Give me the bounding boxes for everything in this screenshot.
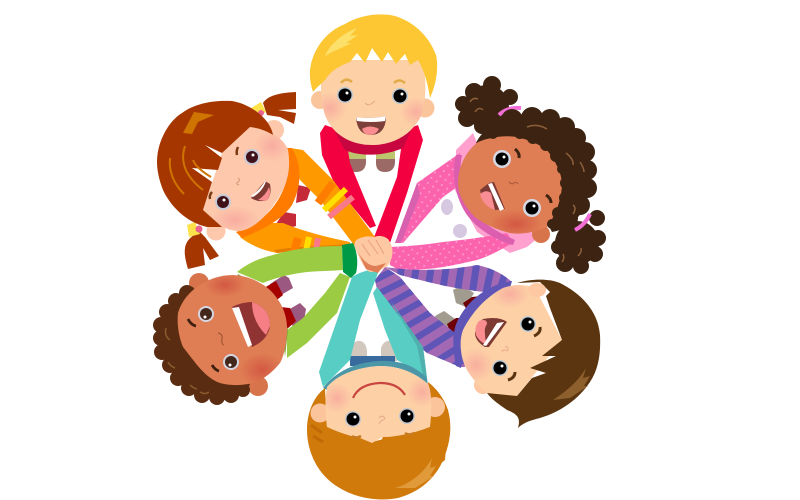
- ears: [310, 397, 445, 422]
- bun: lower: [551, 210, 606, 274]
- lower striped arm: [375, 267, 465, 367]
- shoes: [264, 275, 306, 329]
- brows: [515, 149, 551, 203]
- mouth: [251, 181, 271, 201]
- nose: [237, 178, 240, 185]
- child: boy in purple stripes (lower right): [365, 255, 600, 428]
- nose: [502, 347, 508, 352]
- cheeks: [322, 96, 424, 124]
- face: [326, 366, 431, 443]
- hair: [153, 285, 250, 405]
- shoes: [276, 185, 311, 230]
- hair shine: [166, 328, 209, 394]
- red sweater arms: [320, 125, 423, 243]
- teal arms: [319, 269, 427, 387]
- hair shine: [325, 28, 358, 56]
- child: girl in orange (upper left): [157, 92, 375, 269]
- orange arms: [240, 148, 375, 253]
- child: boy in green (lower left): [153, 243, 357, 405]
- hair fringe: [310, 420, 448, 498]
- shoes: [435, 285, 481, 336]
- hair shine: [470, 98, 584, 262]
- shirt: [455, 133, 545, 253]
- ears: [206, 120, 284, 240]
- child: blond boy (top): [310, 14, 437, 243]
- shoes and jeans: [350, 341, 397, 366]
- eyes: [198, 306, 239, 370]
- collar: [236, 148, 300, 238]
- mouth: [353, 383, 405, 398]
- lower arm: [390, 233, 513, 270]
- brows: [210, 147, 238, 199]
- hair edge scallops: [488, 125, 572, 229]
- eyes: [345, 408, 415, 427]
- upper arm: [395, 153, 460, 243]
- ears: [311, 91, 434, 118]
- child: girl in pink (upper right): [390, 76, 606, 274]
- brows: [188, 319, 219, 371]
- joined hands: [354, 236, 392, 273]
- brows: [341, 80, 405, 83]
- face: [203, 127, 289, 231]
- ears: [189, 273, 268, 396]
- nose: [379, 416, 385, 424]
- brows: [508, 327, 540, 380]
- nose: [365, 101, 375, 105]
- hair: [487, 280, 600, 428]
- ear: lower: [474, 376, 492, 394]
- brows: [352, 433, 414, 438]
- collar: [454, 155, 515, 245]
- hair shine: [395, 458, 436, 488]
- mouth: [232, 302, 270, 347]
- cheeks: [463, 285, 524, 378]
- hair: [476, 107, 597, 232]
- green arms: [237, 243, 357, 358]
- mouth: [356, 116, 386, 135]
- eyes: [492, 316, 536, 376]
- pigtail: left: [185, 222, 219, 269]
- hair: [157, 101, 273, 227]
- nose: [509, 182, 518, 184]
- hair shine: [553, 368, 590, 400]
- eyes: [337, 87, 408, 104]
- shoes: [441, 199, 467, 238]
- cheek: [496, 213, 536, 234]
- face: [178, 275, 287, 385]
- hair streaks: [311, 425, 323, 442]
- hair: [310, 14, 437, 98]
- child: child in teal (bottom): [307, 269, 450, 500]
- eyes: [215, 149, 260, 210]
- cheeks: [326, 380, 431, 410]
- collar: [453, 281, 512, 368]
- cheeks: [218, 135, 284, 230]
- bun: upper: [455, 76, 518, 134]
- cheeks: [210, 276, 278, 382]
- mouth: [480, 182, 505, 211]
- face: [458, 136, 562, 234]
- hair back: [307, 382, 450, 500]
- ear: [532, 225, 550, 243]
- hair shine: [170, 112, 214, 194]
- ear: upper: [528, 283, 546, 297]
- nose: [218, 333, 224, 345]
- eyes: [493, 150, 541, 217]
- shoes: [347, 150, 395, 172]
- collar: [323, 361, 428, 390]
- face: [321, 60, 425, 145]
- mouth: [475, 318, 507, 347]
- illustration: six children joining hands in a circle: [153, 14, 606, 500]
- upper striped arm: [386, 265, 512, 292]
- face: [461, 285, 562, 396]
- pigtail: right: [251, 92, 296, 124]
- hair ties: [499, 108, 590, 230]
